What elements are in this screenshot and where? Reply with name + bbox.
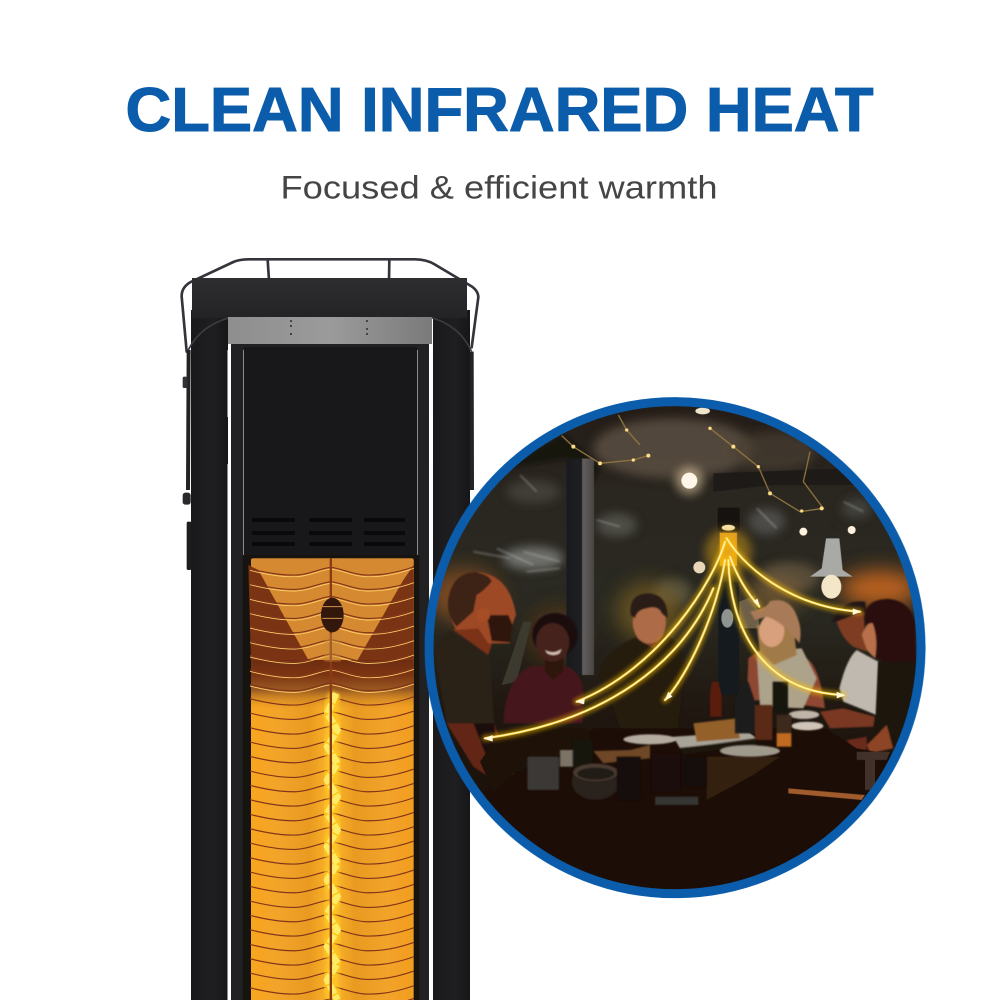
pillar xyxy=(567,458,594,675)
white side slits xyxy=(228,350,433,1000)
blue ring xyxy=(429,402,921,894)
top plate xyxy=(228,317,432,344)
bulb fitting xyxy=(321,598,344,662)
small heater in scene xyxy=(705,508,760,695)
bench xyxy=(788,788,865,800)
filament glow xyxy=(327,693,337,1000)
string lights xyxy=(562,415,824,513)
bottles and glasses xyxy=(710,682,791,747)
table far shadow xyxy=(480,737,514,784)
arrow heads xyxy=(483,598,862,742)
heater product xyxy=(182,259,478,1000)
top cap xyxy=(192,278,467,318)
wave guard highlights xyxy=(248,568,415,692)
man at left xyxy=(435,572,517,784)
inner black panel xyxy=(244,347,417,562)
panel edge lines xyxy=(244,350,418,1000)
element dark surround xyxy=(243,555,419,1000)
right column xyxy=(433,310,470,1000)
orange halo behind guests xyxy=(427,568,920,662)
dark roof at left xyxy=(503,435,600,482)
woman at left xyxy=(503,613,583,723)
glowing heating element xyxy=(243,555,419,1000)
heat arrows glow xyxy=(485,538,860,738)
upper reflector xyxy=(248,558,414,710)
title: CLEAN INFRARED HEAT xyxy=(126,76,874,145)
pots and cups xyxy=(527,740,707,805)
woman with hat xyxy=(747,600,825,708)
plates and food xyxy=(593,710,823,763)
hanging lantern xyxy=(810,522,853,599)
arrow cores xyxy=(485,538,860,738)
filament xyxy=(327,693,337,1000)
handle rail xyxy=(182,259,478,352)
vents xyxy=(252,520,405,544)
man at centre xyxy=(600,593,685,735)
centre rod xyxy=(330,558,332,1000)
globe bulbs xyxy=(675,408,856,573)
woman at right xyxy=(847,599,917,753)
subtitle: Focused & efficient warmth xyxy=(280,170,718,206)
trees and sky patches xyxy=(503,418,872,605)
heat arrows xyxy=(485,538,860,738)
tree highlights xyxy=(473,475,863,572)
table and floor xyxy=(502,728,876,785)
roof beam xyxy=(713,468,863,492)
side tubes and knobs xyxy=(183,318,472,570)
photo inset with ring xyxy=(420,395,930,905)
wooden table surface xyxy=(707,757,780,800)
left column xyxy=(191,310,228,1000)
element base xyxy=(251,558,414,1000)
wave guard lines xyxy=(248,566,415,1000)
palm leaf behind woman xyxy=(502,622,532,685)
background sky xyxy=(434,406,917,792)
chair xyxy=(857,752,890,790)
man at right xyxy=(820,601,878,728)
photo scene xyxy=(434,406,917,890)
inner frame xyxy=(231,344,429,1000)
